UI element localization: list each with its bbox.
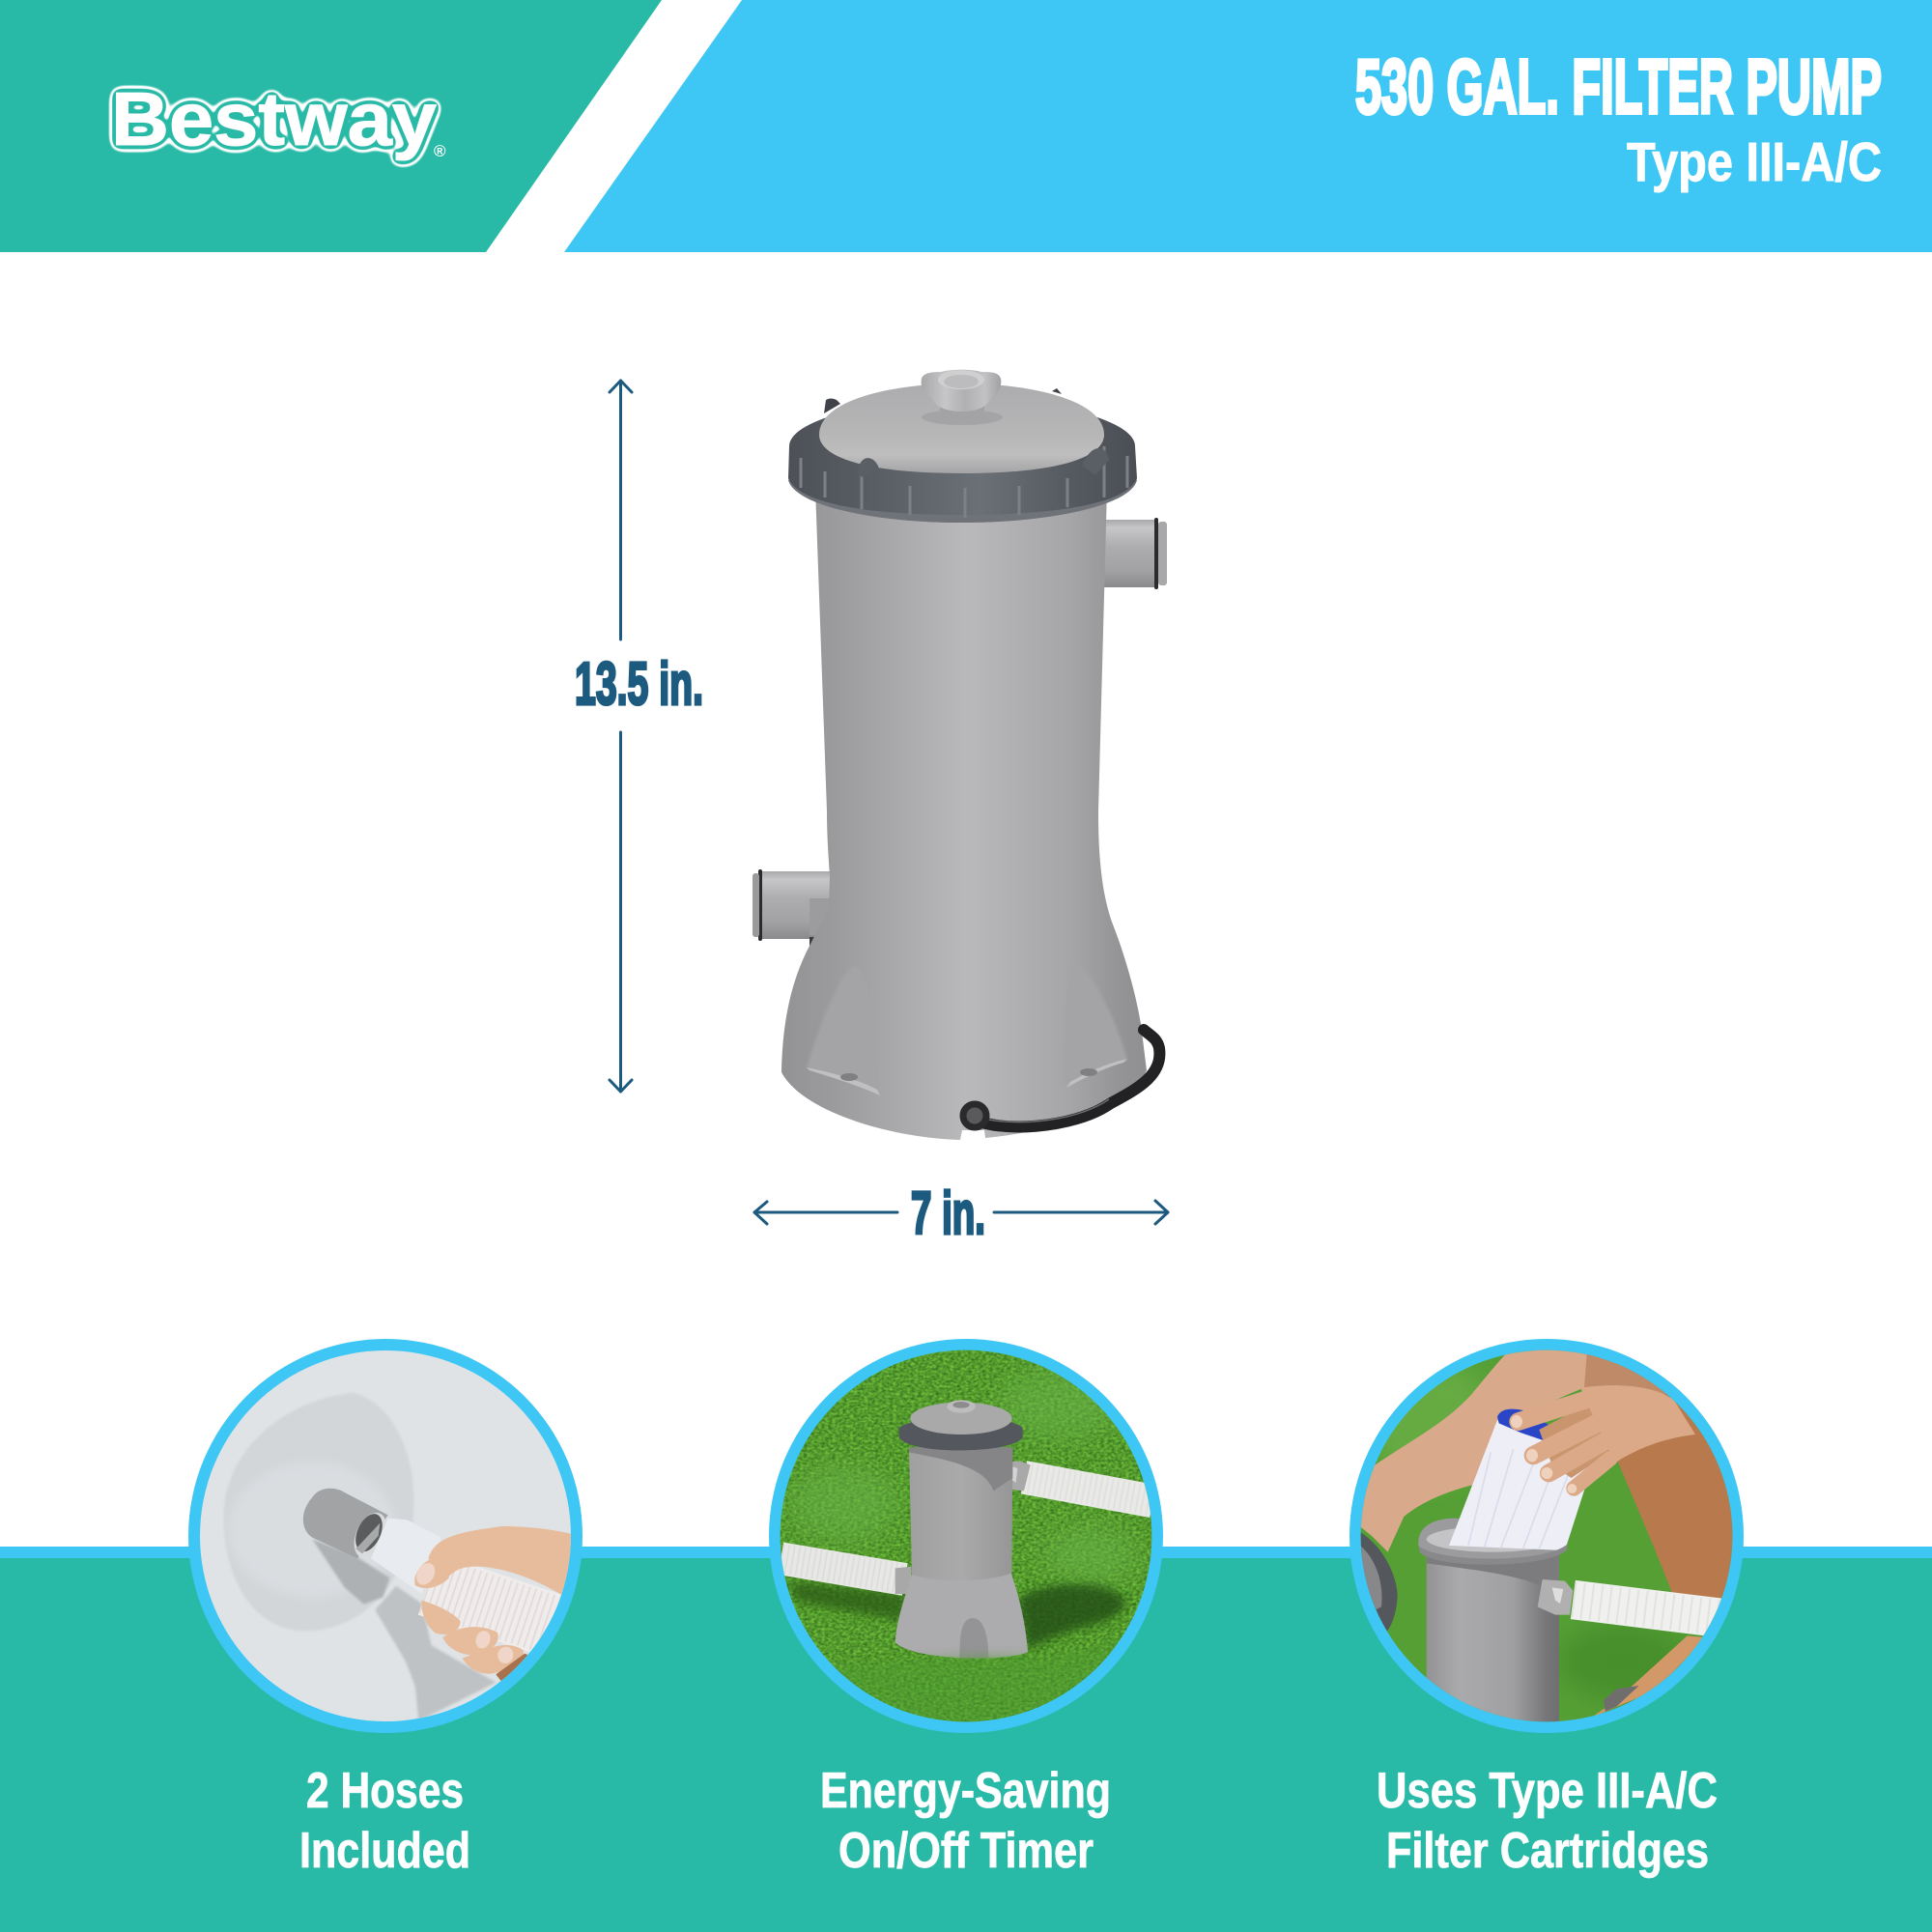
arm xyxy=(1355,1346,1587,1552)
locking ring xyxy=(788,400,1137,523)
right foot rib xyxy=(1063,963,1127,1087)
mounting holes xyxy=(840,1068,1097,1081)
subtitle: Type III-A/C xyxy=(1627,131,1882,193)
header banner xyxy=(0,0,1932,252)
left foot rib xyxy=(807,966,880,1092)
calf xyxy=(1591,1635,1707,1718)
knob xyxy=(947,1400,976,1413)
hose connectors xyxy=(895,1567,911,1594)
logo panel xyxy=(0,0,662,252)
blue cap xyxy=(1497,1408,1548,1440)
feature 1: hoses photo xyxy=(188,1339,582,1733)
lid knob xyxy=(922,370,1003,425)
caption 3 xyxy=(1377,1763,1718,1879)
caption 3: Uses Type III-A/C xyxy=(1377,1763,1718,1819)
feature 3: filter cartridge photo xyxy=(1350,1339,1744,1733)
lid clips xyxy=(824,388,1109,477)
caption 1 xyxy=(299,1763,470,1879)
logo: Bestway: Bestway xyxy=(111,76,437,161)
pump lid xyxy=(1360,1532,1398,1632)
fingernails xyxy=(1511,1415,1577,1493)
filter rim front xyxy=(1418,1544,1568,1565)
foreground grass xyxy=(840,1641,1119,1721)
lid xyxy=(819,384,1104,473)
fitting shadow xyxy=(312,1539,389,1605)
hand xyxy=(1519,1385,1695,1489)
pump body xyxy=(895,1447,1028,1659)
dimension label: 13.5 in.: 13.5 in. xyxy=(575,651,703,718)
bottom band xyxy=(0,1547,1932,1932)
wall patch xyxy=(224,1393,413,1631)
feature 2: timer photo xyxy=(769,1339,1163,1733)
dimension label: 7 in.: 7 in. xyxy=(911,1180,985,1247)
filter cartridge xyxy=(1449,1420,1596,1550)
hand shadow xyxy=(375,1586,496,1721)
hose neck xyxy=(371,1519,441,1594)
pump body xyxy=(781,488,1147,1140)
ring and lid xyxy=(898,1422,1023,1451)
hoses xyxy=(781,1477,1152,1579)
caption 2 xyxy=(820,1763,1111,1879)
caption 1: 2 Hoses xyxy=(306,1763,464,1819)
thigh xyxy=(1584,1354,1733,1605)
logo: Bestway: ® xyxy=(434,142,446,160)
wall fitting xyxy=(303,1489,388,1558)
power cord xyxy=(963,1030,1159,1127)
right outlet port xyxy=(1101,518,1167,589)
caption 3: Filter Cartridges xyxy=(1386,1823,1709,1879)
title panel xyxy=(564,0,1932,252)
grass highlights xyxy=(789,1369,1140,1584)
grass shadows xyxy=(1017,1584,1124,1649)
left inlet port xyxy=(753,869,832,956)
caption 2: On/Off Timer xyxy=(838,1823,1094,1879)
pump rim xyxy=(1418,1519,1557,1559)
caption 2: Energy-Saving xyxy=(820,1763,1111,1819)
hose xyxy=(1573,1600,1721,1618)
nails xyxy=(416,1563,514,1663)
product: filter pump xyxy=(753,370,1167,1140)
pump body xyxy=(1427,1552,1559,1732)
dimension: height arrow xyxy=(610,381,632,1092)
dimension: width arrow xyxy=(754,1201,1168,1224)
hose connector xyxy=(1538,1579,1573,1615)
corrugated hose xyxy=(428,1584,563,1630)
caption 1: Included xyxy=(299,1823,470,1879)
sandal xyxy=(1604,1686,1639,1712)
hand xyxy=(414,1526,573,1683)
